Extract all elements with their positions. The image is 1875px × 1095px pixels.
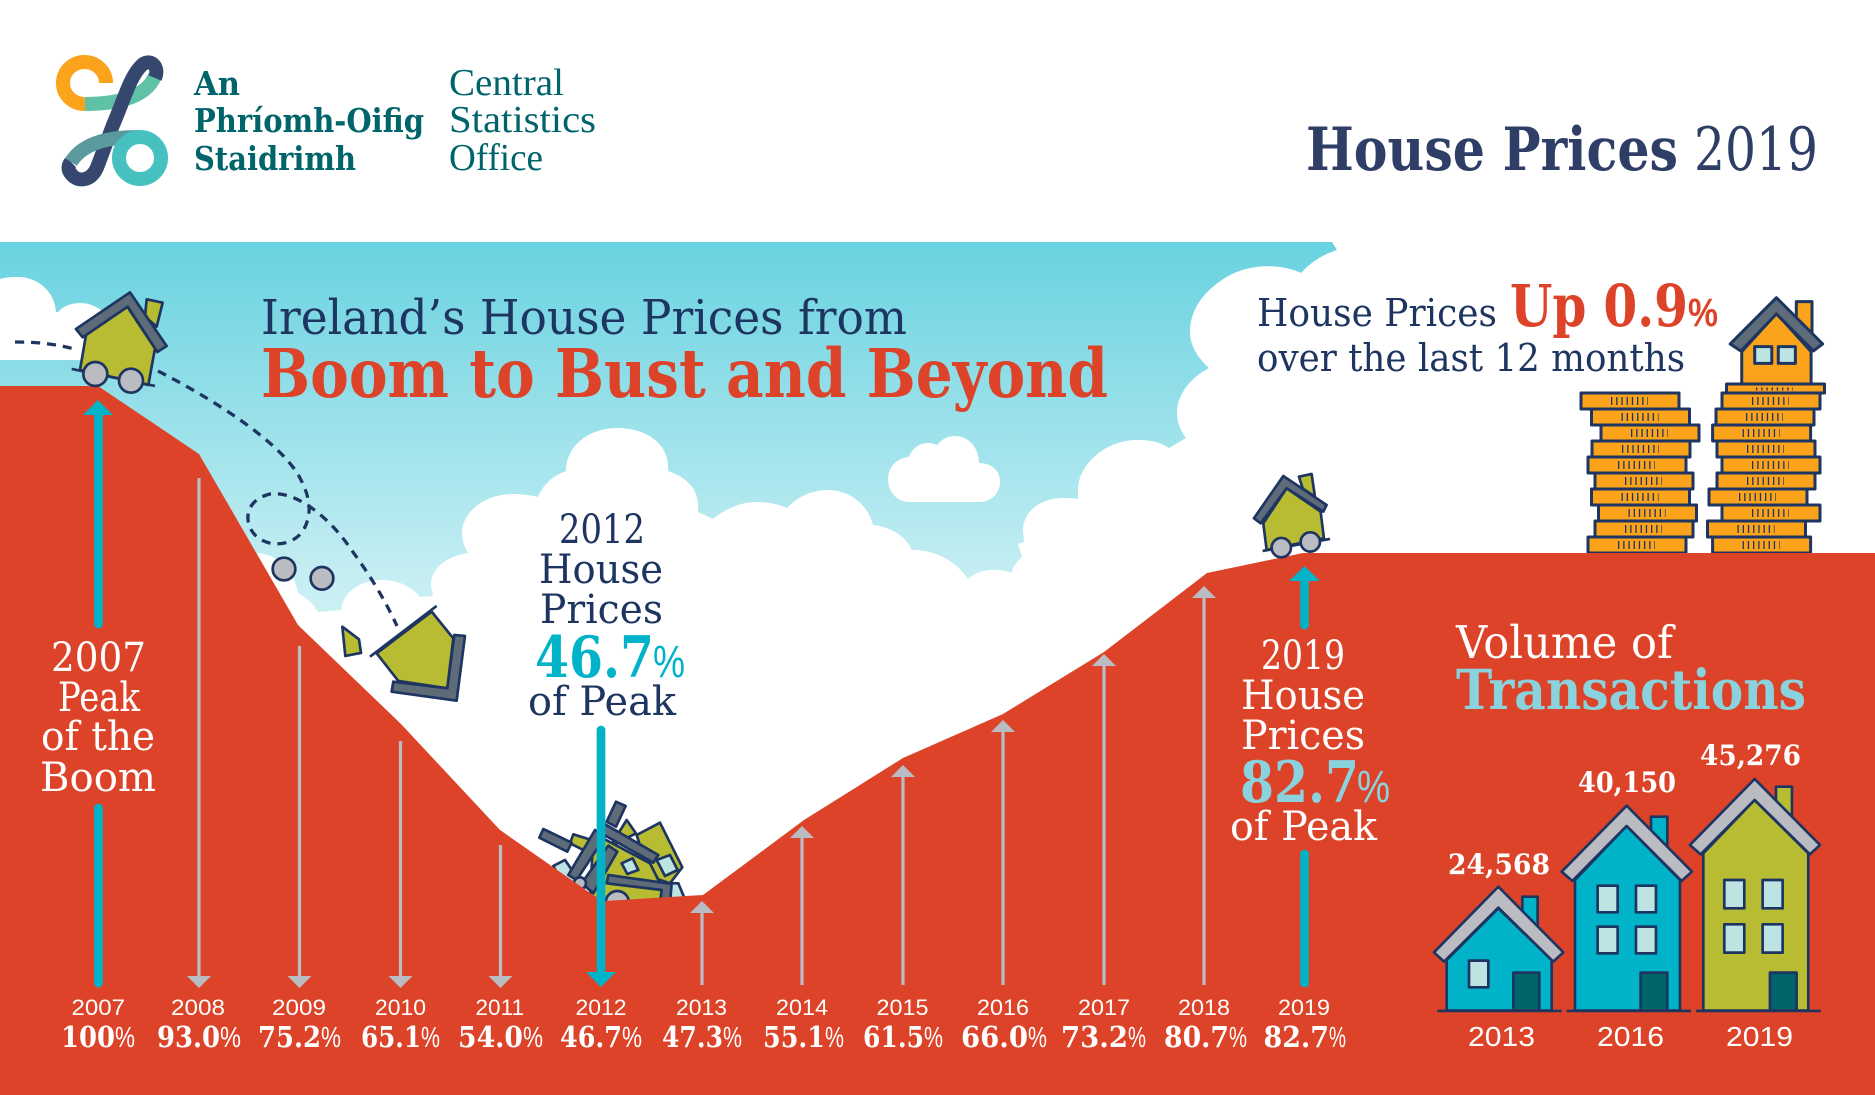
2013 value: 47.3 <box>662 1020 723 1054</box>
label: 2019 house prices 82.7% of peak: House <box>1241 673 1365 719</box>
annual change callout: over the last 12 months <box>1257 336 1685 380</box>
2012 value <box>560 995 642 1054</box>
2015 value: 2015 <box>876 995 928 1020</box>
2013 value <box>662 995 742 1054</box>
label: 2019 house prices 82.7% of peak: 82.7 <box>1240 749 1359 816</box>
label: 2012 house prices 46.7% of peak: 46.7 <box>535 624 654 691</box>
2007 value: % <box>115 1022 135 1054</box>
2015 value: 61.5 <box>863 1020 924 1054</box>
2010 value: % <box>421 1022 440 1054</box>
label: 2019 house prices 82.7% of peak: % <box>1357 761 1390 812</box>
transaction counts: 40,150 <box>1578 766 1676 799</box>
2016 value <box>961 995 1047 1054</box>
icon: stacks of coins with house on top <box>1581 298 1824 553</box>
2016 value: 2016 <box>977 995 1029 1020</box>
2007 value: 100 <box>61 1020 115 1054</box>
2011 value: % <box>523 1022 543 1054</box>
grey arrows for each year <box>187 478 1216 988</box>
arrow 2009 <box>298 646 301 978</box>
arrow 2013 <box>700 912 704 985</box>
2010 value: 65.1 <box>361 1020 421 1054</box>
2011 value <box>458 995 543 1054</box>
annual change callout: House Prices <box>1257 291 1497 335</box>
clouds: small middle cloud <box>888 436 1000 502</box>
arrow 2010 <box>399 741 402 978</box>
transactions chart: houses <box>1434 779 1821 1011</box>
logo text: English name <box>449 62 596 179</box>
label: 2019 house prices 82.7% of peak: of Peak <box>1230 804 1378 850</box>
transaction years: 2019 <box>1726 1021 1793 1052</box>
2015 value <box>863 995 943 1054</box>
2008 value <box>157 995 241 1054</box>
label: 2019 house prices 82.7% of peak: 2019 <box>1261 633 1345 679</box>
transaction years: 2013 <box>1468 1021 1535 1052</box>
transaction counts: 24,568 <box>1448 848 1550 881</box>
volume of transactions heading <box>1455 616 1806 722</box>
label: 2007 peak of the boom: Peak <box>58 675 141 721</box>
2019 value: % <box>1329 1022 1346 1054</box>
arrow 2014 <box>800 836 804 985</box>
red terrain: price curve <box>0 386 1875 1095</box>
2015 value: % <box>924 1022 943 1054</box>
2014 value <box>763 995 844 1054</box>
page title: House Prices <box>1306 115 1678 185</box>
logo text: English name: Office <box>449 137 543 179</box>
label: 2007 peak of the boom <box>40 635 156 801</box>
label: 2007 peak of the boom: of the <box>41 714 155 760</box>
2008 value: 93.0 <box>157 1020 220 1054</box>
arrow: 2012 trough <box>586 730 616 987</box>
logo text: Irish name: An <box>193 64 240 103</box>
2017 value: % <box>1128 1022 1146 1054</box>
coin stack: left <box>1581 393 1699 553</box>
icon: house on wheels at peak <box>72 292 167 393</box>
chart heading: Boom to Bust and Beyond <box>261 334 1108 413</box>
2017 value <box>1061 995 1146 1054</box>
arrow 2018 <box>1202 596 1206 985</box>
dashed trajectory of the falling house <box>15 342 397 626</box>
2007 value: 2007 <box>72 995 125 1020</box>
arrow: 2019 <box>1289 566 1320 983</box>
2009 value: 2009 <box>272 995 326 1020</box>
icon: falling house pieces <box>273 558 465 701</box>
arrow: 2007 peak <box>83 400 113 983</box>
label: 2019 house prices 82.7% of peak <box>1230 633 1390 850</box>
2016 value: 66.0 <box>961 1020 1028 1054</box>
arrow 2011 <box>499 845 502 978</box>
2018 value <box>1164 995 1247 1054</box>
house 2019 <box>1690 779 1821 1011</box>
label: 2012 house prices 46.7% of peak: Prices <box>540 587 663 633</box>
label: 2019 house prices 82.7% of peak: Prices <box>1241 713 1365 759</box>
page title: 2019 <box>1694 115 1818 185</box>
icon: orange house on coins <box>1730 298 1823 384</box>
2019 value: 82.7 <box>1264 1020 1329 1054</box>
clouds: top-left cloud <box>0 277 110 360</box>
2009 value: 75.2 <box>258 1020 321 1054</box>
2016 value: % <box>1028 1022 1047 1054</box>
2018 value: 2018 <box>1178 995 1230 1020</box>
2012 value: % <box>622 1022 642 1054</box>
2019 value <box>1264 995 1346 1054</box>
clouds: main cloud bank <box>240 242 1875 800</box>
2007 value <box>61 995 135 1054</box>
house 2016 <box>1562 806 1692 1011</box>
2009 value: % <box>321 1022 341 1054</box>
sky background <box>0 242 1345 742</box>
transaction counts <box>1448 739 1801 881</box>
transaction years: 2016 <box>1597 1021 1664 1052</box>
logo mark <box>63 62 161 179</box>
logo text: Irish name <box>193 64 424 178</box>
label: 2012 house prices 46.7% of peak: of Peak <box>528 679 677 725</box>
label: 2012 house prices 46.7% of peak: 2012 <box>559 507 645 553</box>
2008 value: 2008 <box>171 995 225 1020</box>
2012 value: 2012 <box>576 995 626 1020</box>
volume of transactions heading: Transactions <box>1456 657 1806 722</box>
label: 2007 peak of the boom: Boom <box>40 755 156 801</box>
arrow 2015 <box>901 775 905 985</box>
2010 value: 2010 <box>375 995 426 1020</box>
arrow 2016 <box>1001 730 1005 985</box>
2013 value: % <box>723 1022 742 1054</box>
icon: house on wheels at 2019 <box>1254 474 1330 557</box>
2008 value: % <box>220 1022 241 1054</box>
logo text: Irish name: Phríomh-Oifig <box>194 101 424 140</box>
label: 2012 house prices 46.7% of peak: House <box>539 547 663 593</box>
logo text: English name: Statistics <box>449 99 596 141</box>
volume of transactions heading: Volume of <box>1455 616 1676 669</box>
annual change callout <box>1257 272 1718 380</box>
arrow 2017 <box>1102 664 1106 985</box>
2011 value: 2011 <box>476 995 524 1020</box>
2019 value: 2019 <box>1278 995 1330 1020</box>
2012 value: 46.7 <box>560 1020 622 1054</box>
2017 value: 73.2 <box>1061 1020 1128 1054</box>
chart heading: Ireland’s House Prices from <box>261 290 907 346</box>
logo text: English name: Central <box>449 62 564 104</box>
label: 2007 peak of the boom: 2007 <box>51 635 146 681</box>
transaction counts: 45,276 <box>1700 739 1801 772</box>
year and percentage labels along the base <box>61 995 1346 1054</box>
annual change callout: % <box>1688 291 1718 335</box>
2014 value: 55.1 <box>763 1020 825 1054</box>
2014 value: % <box>825 1022 844 1054</box>
2018 value: % <box>1229 1022 1247 1054</box>
label: 2012 house prices 46.7% of peak <box>528 507 685 725</box>
2010 value <box>361 995 440 1054</box>
annual change callout: Up 0.9 <box>1510 272 1688 340</box>
label: 2012 house prices 46.7% of peak: % <box>653 636 685 687</box>
chart heading <box>261 290 1108 413</box>
2018 value: 80.7 <box>1164 1020 1229 1054</box>
transaction years <box>1468 1021 1793 1052</box>
2011 value: 54.0 <box>458 1020 523 1054</box>
logo <box>63 62 596 179</box>
2014 value: 2014 <box>776 995 828 1020</box>
logo text: Irish name: Staidrimh <box>194 139 356 178</box>
house 2013 <box>1434 887 1563 1011</box>
coin stack: right <box>1708 384 1824 553</box>
icon: collapsed house rubble at 2012 <box>539 802 687 914</box>
2017 value: 2017 <box>1078 995 1130 1020</box>
2013 value: 2013 <box>676 995 727 1020</box>
2009 value <box>258 995 341 1054</box>
arrow 2008 <box>197 478 201 978</box>
